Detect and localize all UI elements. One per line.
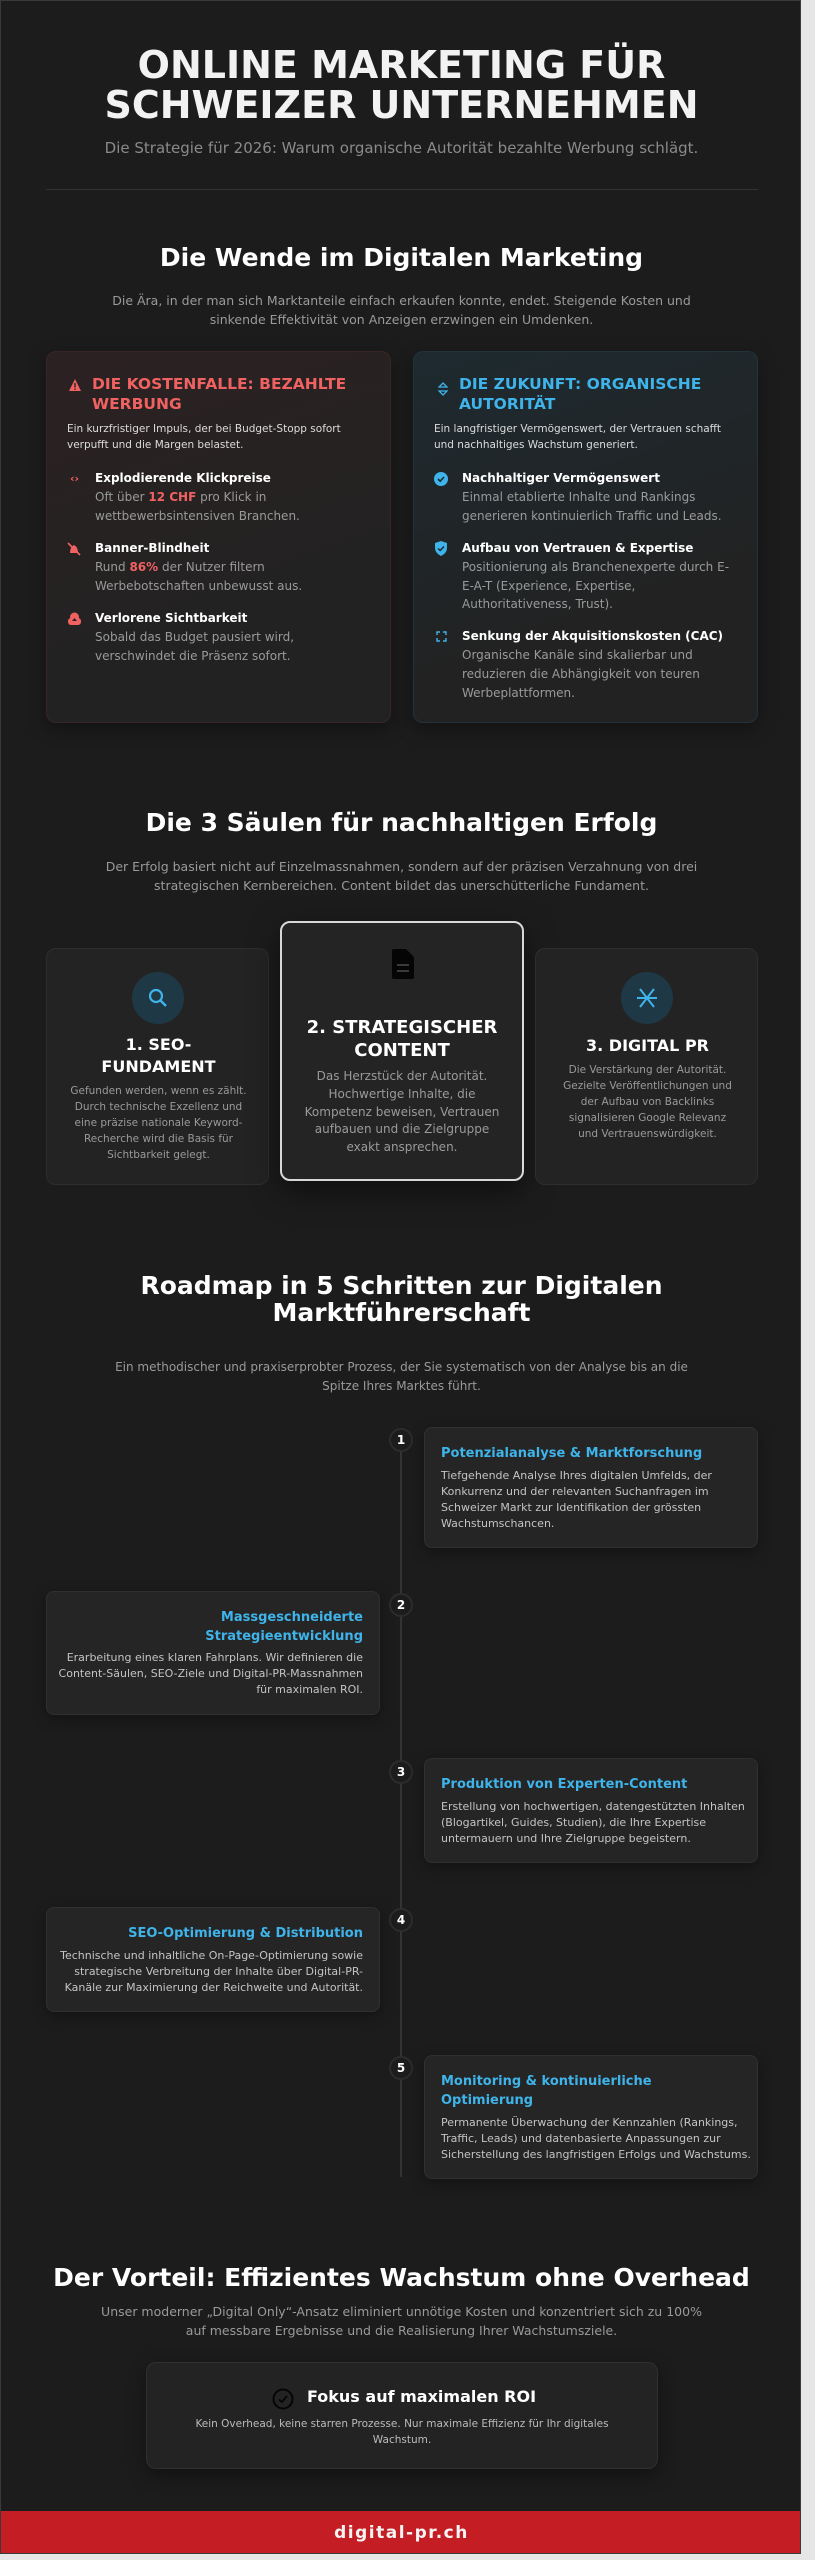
icon: code: ‹› <box>70 472 79 485</box>
intro text: Säulen <box>106 859 697 892</box>
step 3 number <box>389 1760 413 1784</box>
item: Vermögenswert <box>434 471 722 523</box>
intro text: Die Wende <box>112 293 691 326</box>
intro text: Vorteil <box>101 2304 702 2338</box>
callout title: Fokus auf maximalen ROI <box>307 2387 536 2406</box>
timeline <box>389 1428 413 2177</box>
item: Vertrauen <box>435 541 729 611</box>
intro text: Säulen: strategischen Kernbereichen. Content bildet das unerschütterliche Fundament. <box>154 878 649 892</box>
intro text: Die Wende: sinkende Effektivität von Anzeigen erzwingen ein Umdenken. <box>210 312 593 326</box>
icon: arrows <box>438 382 448 396</box>
pillar title: FUNDAMENT <box>101 1057 216 1076</box>
item: Vertrauen: Authoritativeness, Trust). <box>462 597 613 611</box>
step 5 card: Monitoring & kontinuierliche <box>441 2074 652 2089</box>
item: Vertrauen: Aufbau von Vertrauen & Expertise <box>462 541 693 555</box>
item: Vermögenswert: Einmal etablierte Inhalte und Rankings <box>462 490 695 504</box>
heading: Die Wende: Die Wende im Digitalen Marketing <box>160 243 643 272</box>
item: Banner-Blindheit: Rund 86% der Nutzer filtern <box>95 560 265 574</box>
icon: cloud <box>68 612 81 625</box>
step 1 card: Potenzialanalyse & Marktforschung <box>441 1446 702 1461</box>
step 1 card: Tiefgehende Analyse Ihres digitalen Umfelds, der <box>441 1469 712 1482</box>
title: SCHWEIZER UNTERNEHMEN <box>104 83 698 127</box>
icon: check circle <box>434 472 448 486</box>
step 1 card: Schweizer Markt zur Identifikation der grössten <box>441 1501 701 1514</box>
heading: 3 Säulen: Die 3 Säulen für nachhaltigen Erfolg <box>146 808 657 837</box>
step 2 card: Erarbeitung eines klaren Fahrplans. Wir definieren die <box>67 1651 363 1664</box>
item: CAC <box>436 629 723 700</box>
pillar text: eine präzise nationale Keyword- <box>75 1117 242 1129</box>
heading: Roadmap: Marktführerschaft <box>273 1298 530 1327</box>
panel: Zukunft <box>413 351 758 723</box>
heading: Vorteil: Der Vorteil: Effizientes Wachstum ohne Overhead <box>53 2263 750 2292</box>
intro text: Vorteil: auf messbare Ergebnisse und die Realisierung Ihrer Wachstumsziele. <box>186 2322 617 2338</box>
step 5 card: Optimierung <box>441 2093 533 2108</box>
item: CAC: Werbeplattformen. <box>462 686 575 700</box>
panel: pillar Digital PR <box>535 948 758 1185</box>
icon: warning <box>69 379 81 391</box>
pillar title <box>101 1035 216 1076</box>
icon: asterisk <box>621 972 673 1024</box>
pillar text: Durch technische Exzellenz und <box>75 1101 242 1113</box>
pillar text: und Vertrauenswürdigkeit. <box>578 1128 717 1140</box>
title <box>104 42 698 127</box>
item: Klickpreise: wettbewerbsintensiven Branchen. <box>95 509 300 523</box>
item: Klickpreise: Oft über 12 CHF pro Klick in <box>95 490 266 504</box>
footer: digital-pr.ch <box>334 2523 469 2543</box>
step 4 number: 4 <box>397 1913 405 1927</box>
item: Sichtbarkeit: Sobald das Budget pausiert wird, <box>95 630 294 644</box>
intro text: Säulen: Der Erfolg basiert nicht auf Einzelmassnahmen, sondern auf der präzisen Verzahnung von drei <box>106 859 697 874</box>
icon: check circle <box>272 2388 294 2410</box>
heading: Kostenfalle <box>92 375 346 413</box>
pillar text: Gefunden werden, wenn es zählt. <box>70 1085 247 1097</box>
heading: Kostenfalle: DIE KOSTENFALLE: BEZAHLTE <box>92 375 346 393</box>
step 3 number: 3 <box>397 1765 405 1779</box>
step 5 card <box>424 2055 758 2179</box>
step 1 number <box>389 1428 413 1452</box>
callout text: Wachstum. <box>373 2434 431 2446</box>
footer <box>1 2511 802 2555</box>
heading: Roadmap <box>140 1271 663 1327</box>
step 2 number: 2 <box>397 1598 405 1612</box>
pillar text: Recherche wird die Basis für <box>84 1133 233 1145</box>
step 2 number <box>389 1593 413 1617</box>
pillar title: 1. SEO- <box>126 1035 191 1054</box>
step 2 card: Strategieentwicklung <box>205 1629 363 1644</box>
item: Vertrauen: E-A-T (Experience, Expertise, <box>462 578 635 592</box>
description <box>67 423 341 451</box>
step 2 card: Content-Säulen, SEO-Ziele und Digital-PR-Massnahmen <box>59 1667 363 1680</box>
title: ONLINE MARKETING FÜR <box>138 43 665 87</box>
step 1 card: Wachstumschancen. <box>441 1517 554 1530</box>
step 4 card: Technische und inhaltliche On-Page-Optimierung sowie <box>60 1949 363 1962</box>
item: CAC: reduzieren die Abhängigkeit von teuren <box>462 667 700 681</box>
subtitle: Die Strategie für 2026: Warum organische Autorität bezahlte Werbung schlägt. <box>105 139 698 157</box>
step 5 card: Sicherstellung des langfristigen Erfolgs und Wachstums. <box>441 2148 751 2161</box>
pillar title: 3. DIGITAL PR <box>586 1036 709 1055</box>
callout text <box>195 2418 609 2446</box>
pillar text: exakt ansprechen. <box>346 1140 457 1154</box>
item: Klickpreise: Explodierende Klickpreise <box>95 471 271 485</box>
step 4 card: SEO-Optimierung & Distribution <box>128 1926 363 1941</box>
item: Sichtbarkeit: Verlorene Sichtbarkeit <box>95 611 247 625</box>
step 1 card <box>424 1427 758 1548</box>
step 1 number: 1 <box>397 1433 405 1447</box>
item: Sichtbarkeit: verschwindet die Präsenz sofort. <box>95 649 291 663</box>
step 3 card <box>424 1758 758 1863</box>
intro text: Vorteil: Unser moderner „Digital Only“-Ansatz eliminiert unnötige Kosten und konzentriert sich zu 100% <box>101 2304 702 2319</box>
pillar text: Das Herzstück der Autorität. <box>317 1069 487 1083</box>
heading: Roadmap: Roadmap in 5 Schritten zur Digitalen <box>140 1271 663 1300</box>
pillar text <box>70 1085 247 1161</box>
intro text: Roadmap: Ein methodischer und praxiserprobter Prozess, der Sie systematisch von der Analyse bis an die <box>115 1360 688 1374</box>
step 3 card: (Blogartikel, Guides, Studien), die Ihre Expertise <box>441 1816 706 1829</box>
item: CAC: Organische Kanäle sind skalierbar und <box>462 648 693 662</box>
pillar text: Kompetenz beweisen, Vertrauen <box>305 1105 499 1119</box>
pillar text: Hochwertige Inhalte, die <box>328 1087 476 1101</box>
step 3 card: Produktion von Experten-Content <box>441 1777 687 1792</box>
item: Vermögenswert: generieren kontinuierlich Traffic und Leads. <box>462 509 722 523</box>
item: Vermögenswert: Nachhaltiger Vermögenswert <box>462 471 660 485</box>
panel: Kostenfalle <box>46 351 391 723</box>
intro text: Roadmap: Spitze Ihres Marktes führt. <box>322 1378 481 1392</box>
pillar text: Die Verstärkung der Autorität. <box>569 1064 726 1076</box>
step 5 card: Traffic, Leads) und datenbasierte Anpassungen zur <box>441 2132 721 2145</box>
pillar title <box>307 1017 497 1061</box>
callout: ROI <box>146 2362 658 2469</box>
item: Klickpreise <box>70 471 300 523</box>
pillar text: der Aufbau von Backlinks <box>581 1096 714 1108</box>
step 4 card <box>46 1907 380 2012</box>
pillar text: signalisieren Google Relevanz <box>569 1112 726 1124</box>
pillar text: aufbauen und die Zielgruppe <box>315 1122 489 1136</box>
heading: Zukunft: DIE ZUKUNFT: ORGANISCHE <box>459 375 701 393</box>
step 5 number <box>389 2056 413 2080</box>
step 5 card: Permanente Überwachung der Kennzahlen (Rankings, <box>441 2116 738 2129</box>
panel: pillar SEO <box>46 948 269 1185</box>
intro text: Roadmap <box>115 1360 688 1392</box>
item: Vertrauen: Positionierung als Branchenexperte durch E- <box>462 560 729 574</box>
description <box>434 423 721 451</box>
pillar text: Gezielte Veröffentlichungen und <box>563 1080 732 1092</box>
panel: pillar Content <box>280 921 524 1181</box>
pillar text <box>563 1064 732 1140</box>
step 2 card <box>46 1591 380 1715</box>
pillar text: Sichtbarkeit gelegt. <box>107 1149 210 1161</box>
icon: search <box>132 972 184 1024</box>
step 4 card: strategische Verbreitung der Inhalte über Digital-PR- <box>74 1965 363 1978</box>
step 3 card: Erstellung von hochwertigen, datengestützten Inhalten <box>441 1800 745 1813</box>
step 2 card: Massgeschneiderte <box>221 1610 363 1625</box>
intro text: Die Wende: Die Ära, in der man sich Marktanteile einfach erkaufen konnte, endet. Steigende Kosten und <box>112 293 691 308</box>
item: Sichtbarkeit <box>68 611 294 663</box>
description: verpufft und die Margen belastet. <box>67 439 243 451</box>
step 4 card: Kanäle zur Maximierung der Reichweite und Autorität. <box>65 1981 363 1994</box>
step 3 card: untermauern und Ihre Zielgruppe begeistern. <box>441 1832 691 1845</box>
description: Ein kurzfristiger Impuls, der bei Budget-Stopp sofort <box>67 423 341 435</box>
item: Banner-Blindheit: Werbebotschaften unbewusst aus. <box>95 579 302 593</box>
step 5 number: 5 <box>397 2061 405 2075</box>
icon: shield <box>435 541 447 556</box>
item: CAC: Senkung der Akquisitionskosten (CAC) <box>462 629 723 643</box>
icon: document <box>392 949 414 979</box>
description: Ein langfristiger Vermögenswert, der Vertrauen schafft <box>434 423 721 435</box>
item: Banner-Blindheit <box>68 541 302 593</box>
pillar text <box>305 1069 499 1154</box>
pillar title: 2. STRATEGISCHER <box>307 1017 497 1038</box>
step 1 card: Konkurrenz und der relevanten Suchanfragen im <box>441 1485 709 1498</box>
pillar title: CONTENT <box>354 1040 450 1061</box>
description: und nachhaltiges Wachstum generiert. <box>434 439 638 451</box>
heading: Kostenfalle: WERBUNG <box>92 395 182 413</box>
icon: expand <box>436 631 447 642</box>
heading: Zukunft: AUTORITÄT <box>459 395 555 413</box>
step 2 card: für maximalen ROI. <box>256 1683 363 1696</box>
callout text: Kein Overhead, keine starren Prozesse. Nur maximale Effizienz für Ihr digitales <box>195 2418 609 2430</box>
item: Banner-Blindheit: Banner-Blindheit <box>95 541 209 555</box>
heading: Zukunft <box>459 375 701 413</box>
icon: bell slash <box>68 542 80 556</box>
step 4 number <box>389 1908 413 1932</box>
